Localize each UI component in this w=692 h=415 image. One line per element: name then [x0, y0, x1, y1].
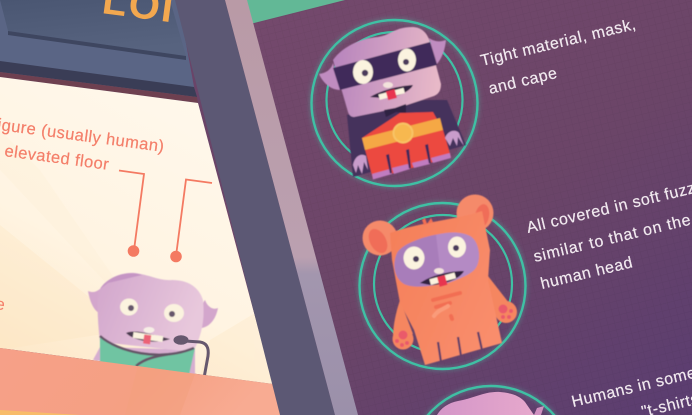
ring: costume two — [360, 203, 526, 369]
body — [390, 211, 502, 365]
character: fuzzy bear suit — [362, 194, 517, 365]
frame: dark vertical band — [175, 0, 335, 415]
left ear — [319, 63, 340, 90]
character: speaker at podium — [88, 273, 218, 375]
arms — [392, 276, 517, 350]
chest fold marks — [433, 293, 460, 319]
panel: purple costume background — [225, 0, 692, 415]
caption: costume one: Tight material, mask, — [479, 16, 638, 70]
buckle — [394, 124, 412, 142]
ears — [362, 194, 494, 256]
boots — [372, 153, 451, 180]
ring: costume one — [312, 20, 478, 186]
callout line: right — [170, 180, 212, 262]
belt — [362, 118, 443, 150]
collar and green shirt — [100, 336, 195, 375]
leg gaps — [438, 332, 482, 362]
left hand — [353, 155, 368, 174]
mask band — [333, 42, 437, 90]
leg gaps — [386, 144, 431, 174]
eyes — [404, 236, 466, 270]
paws — [395, 304, 513, 347]
right hand — [445, 131, 464, 146]
head — [98, 273, 204, 352]
cape — [347, 100, 466, 177]
ears — [88, 289, 102, 314]
frame: light vertical band — [225, 0, 358, 415]
podium — [0, 348, 281, 415]
callout line: left — [119, 170, 144, 257]
bow tie — [384, 104, 406, 117]
caption: costume one — [479, 16, 638, 98]
red suit — [362, 112, 451, 179]
panel: cream stage — [0, 77, 273, 384]
mouth — [126, 327, 170, 344]
caption: costume two: human head — [539, 254, 635, 293]
body sides — [93, 347, 195, 375]
ring: costume three — [408, 386, 574, 415]
label: elevated floor text: elevated floor — [3, 142, 110, 174]
right ear — [429, 38, 446, 64]
mouth — [370, 82, 413, 100]
caption: costume one: and cape — [487, 65, 559, 98]
caption: costume two — [525, 179, 692, 293]
microphone — [174, 335, 208, 378]
stage light rays — [0, 130, 272, 384]
top tufts — [422, 218, 433, 225]
eyes — [353, 48, 416, 84]
face — [394, 233, 479, 287]
eyes — [120, 298, 184, 322]
head — [333, 27, 441, 117]
caption: costume two: similar to that on the — [532, 212, 692, 266]
character: masked hero — [319, 27, 466, 180]
green strip at top — [240, 0, 345, 24]
panel: screen header — [0, 0, 198, 103]
mouth — [420, 268, 464, 287]
character: third human head top — [437, 392, 544, 415]
